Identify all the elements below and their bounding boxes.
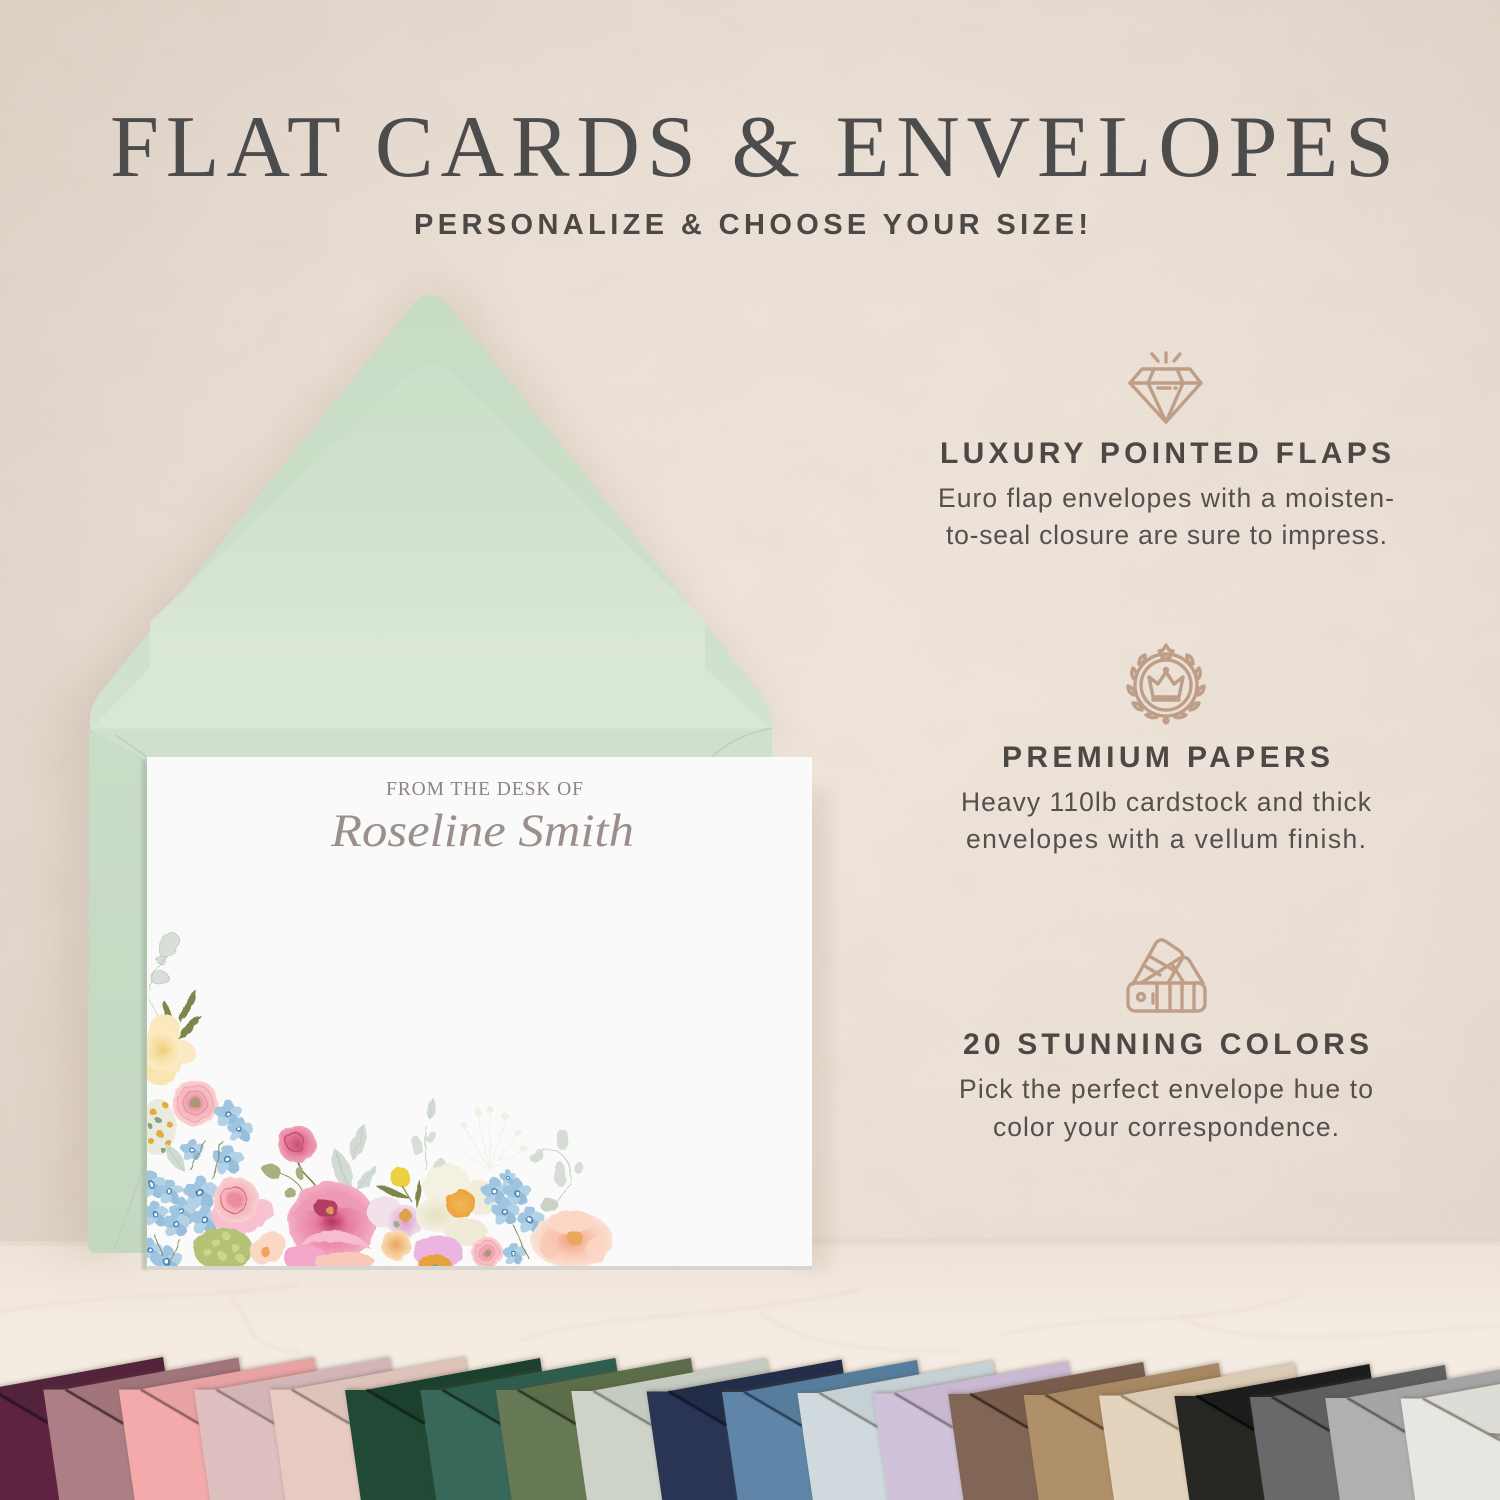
envelope: ivory: [1401, 1366, 1500, 1500]
envelope: burgundy: [0, 1357, 166, 1500]
feature: premium papers: [961, 645, 1372, 854]
heading: 20 STUNNING COLORS: [963, 1028, 1369, 1061]
envelope: black: [1174, 1364, 1372, 1500]
mint green envelope: [88, 295, 772, 1253]
envelope: dusty rose: [43, 1358, 241, 1500]
yellow green cluster: [147, 1098, 177, 1155]
envelope shadow: [65, 285, 785, 1250]
dandelion: [460, 1107, 527, 1170]
envelope: blush: [194, 1358, 392, 1500]
sage sprigs middle: [412, 1097, 447, 1176]
envelope liner: [150, 365, 705, 668]
forget-me-nots right: [479, 1170, 546, 1266]
floral watercolor illustration: [136, 929, 613, 1279]
peony: [288, 1182, 376, 1262]
forget-me-nots left: [147, 1100, 253, 1266]
yellow flower: [142, 1014, 195, 1085]
envelope: lilac: [873, 1362, 1071, 1500]
feature: luxury pointed flaps: [938, 353, 1394, 550]
envelope: coral pink: [119, 1358, 317, 1500]
sage leaf lower left: [165, 1144, 186, 1172]
envelope: charcoal grey: [1250, 1365, 1448, 1500]
lilac flower: [367, 1196, 422, 1239]
description: Pick the perfect envelope hue to: [959, 1074, 1373, 1104]
feature: 20 stunning colors: [959, 940, 1373, 1142]
icon: color swatch fan: [1128, 940, 1205, 1011]
olive leaves top left: [162, 990, 202, 1040]
description: Euro flap envelopes with a moisten-: [938, 483, 1394, 513]
envelope: light grey: [1325, 1366, 1500, 1500]
magenta flower: [413, 1235, 463, 1273]
heading: LUXURY POINTED FLAPS: [940, 437, 1391, 470]
rose: [211, 1177, 274, 1235]
heading: PREMIUM PAPERS: [1002, 741, 1330, 774]
color envelope swatches row: [0, 1357, 1500, 1500]
card bottom edge: [147, 1266, 812, 1270]
peach peony: [531, 1210, 613, 1268]
envelope: mocha: [948, 1362, 1146, 1500]
white flower: [415, 1164, 497, 1246]
apricot ranunculus: [381, 1230, 411, 1260]
envelope: steel blue: [722, 1360, 920, 1500]
sage leaves center: [332, 1124, 376, 1190]
feature: luxury pointed flaps: to-seal closure are sure to impress.: [946, 520, 1387, 550]
subtitle: PERSONALIZE & CHOOSE YOUR SIZE!: [414, 209, 1088, 241]
yellow bud and leaves: [375, 1167, 421, 1208]
sage sprig right: [528, 1129, 584, 1212]
envelope: forest green: [345, 1358, 543, 1500]
dark pink ranunculus: [278, 1125, 317, 1190]
script name: Roseline Smith: [330, 805, 634, 857]
envelope: pale blue: [797, 1361, 995, 1500]
green hydrangea: [193, 1228, 252, 1266]
pink ranunculus: [172, 1080, 218, 1126]
orange flower: [250, 1231, 286, 1265]
icon: diamond: [1130, 353, 1201, 422]
feature: 20 stunning colors: color your correspondence.: [993, 1112, 1339, 1142]
note card: [142, 757, 812, 1270]
envelope body: [88, 732, 772, 1253]
envelope: olive green: [496, 1358, 694, 1500]
eucalyptus top left: [149, 932, 180, 1016]
envelope flap: [90, 295, 772, 730]
envelope: navy: [647, 1360, 845, 1500]
small pink ranunculus: [471, 1237, 503, 1269]
marble shelf: [0, 1238, 1500, 1500]
feature: premium papers: envelopes with a vellum finish.: [966, 824, 1366, 854]
envelope: sage grey: [571, 1359, 769, 1500]
card shadow: [795, 790, 830, 1270]
icon: crown laurel badge: [1128, 645, 1204, 723]
description: Heavy 110lb cardstock and thick: [961, 787, 1372, 817]
pink lower blooms: [284, 1246, 374, 1266]
envelope: teal green: [420, 1358, 618, 1500]
envelope: tan: [1024, 1363, 1222, 1500]
envelope: pale blush: [270, 1358, 468, 1500]
title: FLAT CARDS & ENVELOPES: [110, 99, 1394, 196]
card heading: FROM THE DESK OF: [386, 779, 583, 800]
green buds: [261, 1163, 304, 1198]
envelope: cream: [1099, 1364, 1297, 1500]
